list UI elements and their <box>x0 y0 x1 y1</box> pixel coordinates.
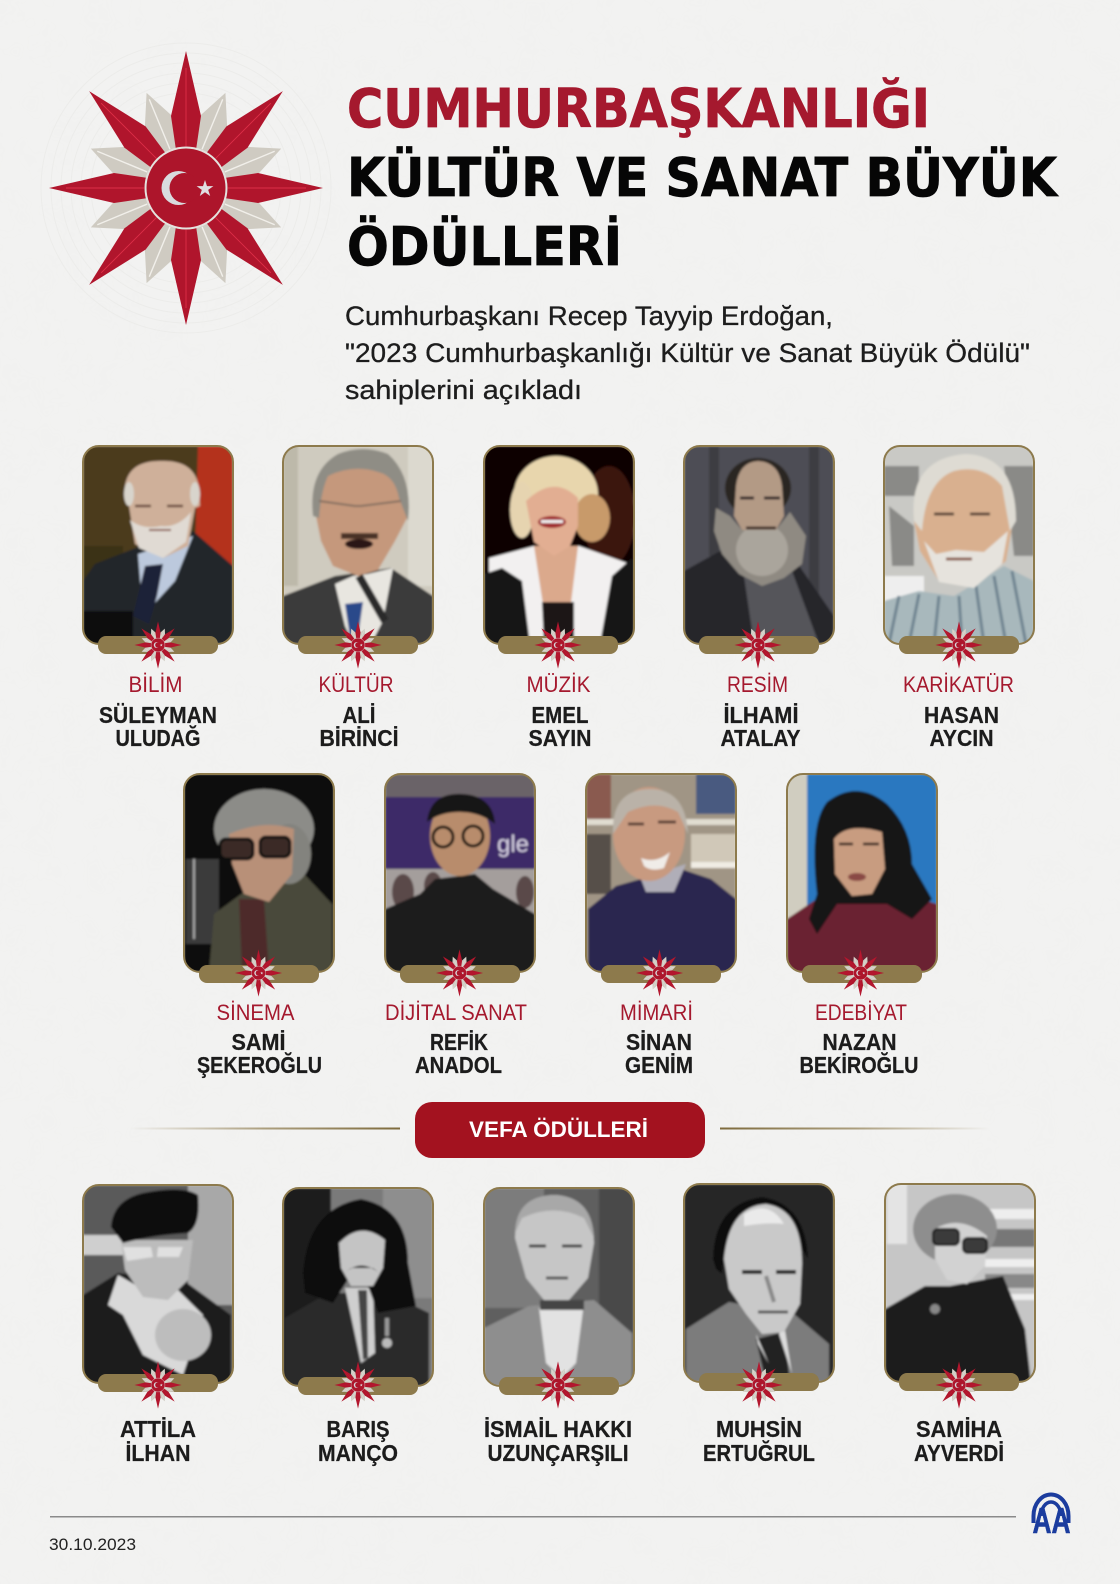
emblem <box>334 1361 382 1409</box>
emblem <box>935 621 983 669</box>
plaque <box>400 965 520 983</box>
card: Süleyman Uludağ <box>83 446 233 751</box>
date: 30.10.2023 <box>49 1535 136 1554</box>
card: Sami Şekeroğlu <box>184 774 334 1078</box>
card: İsmail Hakkı Uzunçarşılı <box>484 1188 634 1466</box>
plaque <box>499 1377 619 1395</box>
name: ULUDAĞ <box>116 724 200 751</box>
emblem <box>334 621 382 669</box>
name: UZUNÇARŞILI <box>488 1440 628 1466</box>
category: RESİM <box>727 672 788 697</box>
name <box>120 1416 196 1466</box>
category: SİNEMA <box>216 1000 295 1025</box>
name <box>720 702 800 751</box>
emblem <box>734 621 782 669</box>
name <box>703 1416 815 1466</box>
name <box>318 1416 398 1466</box>
category: EDEBİYAT <box>815 1000 907 1025</box>
name: ERTUĞRUL <box>703 1439 815 1466</box>
subtitle text <box>345 301 1030 405</box>
title line: black 1: KÜLTÜR VE SANAT BÜYÜK <box>347 146 1059 209</box>
name: SÜLEYMAN <box>99 702 217 728</box>
portrait <box>885 1184 1035 1382</box>
portrait <box>484 446 635 644</box>
portrait: gle <box>497 831 529 858</box>
portrait <box>586 774 736 972</box>
portrait <box>83 446 233 644</box>
name: MANÇO <box>318 1440 398 1466</box>
name <box>528 702 592 751</box>
name: GENİM <box>625 1052 693 1078</box>
name: ATALAY <box>720 725 800 751</box>
category: BİLİM <box>128 672 182 697</box>
emblem <box>534 1361 582 1409</box>
portrait <box>684 446 834 644</box>
card: Attila İlhan <box>83 1185 233 1466</box>
name: EMEL <box>532 702 588 728</box>
portrait <box>184 774 334 972</box>
logo: Anadolu Agency <box>1032 1494 1070 1541</box>
name: SİNAN <box>626 1029 692 1055</box>
emblem <box>134 1361 182 1409</box>
card: Nazan Bekiroğlu <box>787 774 937 1078</box>
card: Emel Sayın <box>484 446 635 751</box>
plaque <box>98 1374 218 1392</box>
plaque <box>699 1373 819 1391</box>
portrait <box>484 1188 634 1386</box>
name <box>197 1029 322 1078</box>
name: SAMİ <box>232 1029 286 1055</box>
card: İlhami Atalay <box>684 446 834 751</box>
name: İLHAN <box>126 1440 190 1466</box>
emblem <box>534 621 582 669</box>
section header: Vefa Ödülleri: VEFA ÖDÜLLERİ <box>469 1117 648 1142</box>
name: İSMAİL HAKKI <box>484 1416 632 1442</box>
name: ŞEKEROĞLU <box>197 1051 322 1078</box>
emblem <box>735 1361 783 1409</box>
portrait <box>283 1188 433 1386</box>
name: AYVERDİ <box>914 1440 1004 1466</box>
emblem <box>935 1361 983 1409</box>
card: Barış Manço <box>283 1188 433 1466</box>
plaque <box>298 1377 418 1395</box>
name <box>800 1029 918 1078</box>
portrait <box>83 1185 233 1383</box>
emblem <box>134 621 182 669</box>
subtitle text: "2023 Cumhurbaşkanlığı Kültür ve Sanat Büyük Ödülü" <box>345 338 1030 368</box>
name: ALİ <box>342 702 376 728</box>
category: MİMARİ <box>620 1000 693 1025</box>
name: ANADOL <box>415 1052 502 1078</box>
plaque <box>601 965 721 983</box>
category: KARİKATÜR <box>903 672 1014 697</box>
card: Ali Birinci <box>283 446 433 751</box>
card: Samiha Ayverdi <box>885 1184 1035 1466</box>
name: HASAN <box>924 702 999 728</box>
title <box>347 77 1059 278</box>
name: REFİK <box>430 1029 488 1055</box>
plaque <box>498 636 618 654</box>
plaque <box>98 636 218 654</box>
category: KÜLTÜR <box>318 672 394 697</box>
name: MUHSİN <box>716 1416 802 1442</box>
name: AYCIN <box>930 725 994 751</box>
emblem <box>837 949 884 997</box>
subtitle text: Cumhurbaşkanı Recep Tayyip Erdoğan, <box>345 301 833 331</box>
plaque <box>899 1373 1019 1391</box>
card: Hasan Aycın <box>884 446 1034 751</box>
name: ATTİLA <box>120 1416 196 1442</box>
name <box>625 1029 693 1078</box>
plaque <box>699 636 819 654</box>
name: SAYIN <box>528 725 592 751</box>
portrait <box>385 774 535 972</box>
name: BARIŞ <box>326 1416 390 1442</box>
category: DİJİTAL SANAT <box>385 1000 527 1025</box>
portrait <box>684 1184 834 1382</box>
card: Muhsin Ertuğrul <box>684 1184 834 1466</box>
emblem <box>235 949 282 997</box>
name <box>320 702 398 751</box>
plaque <box>298 636 418 654</box>
plaque <box>899 636 1019 654</box>
name <box>415 1029 502 1078</box>
category: MÜZİK <box>526 672 591 697</box>
name <box>484 1416 632 1466</box>
name: BEKİROĞLU <box>800 1051 918 1078</box>
logo: Anadolu Agency: AA <box>1032 1500 1070 1541</box>
emblem: large Turkish state star <box>41 43 331 333</box>
name: SAMİHA <box>916 1416 1002 1442</box>
name: İLHAMİ <box>724 702 798 728</box>
portrait <box>884 446 1034 644</box>
portrait <box>283 446 433 644</box>
emblem <box>436 949 483 997</box>
card: Sinan Genim <box>586 774 736 1078</box>
name <box>914 1416 1004 1466</box>
subtitle text: sahiplerini açıkladı <box>345 375 582 405</box>
section header: Vefa Ödülleri <box>130 1102 990 1158</box>
emblem <box>636 949 683 997</box>
title line: black 2: ÖDÜLLERİ <box>347 215 622 278</box>
title line: red: CUMHURBAŞKANLIĞI <box>347 77 930 140</box>
plaque <box>199 965 319 983</box>
footer line <box>50 1516 1016 1518</box>
card: Refik Anadol <box>385 774 535 1078</box>
portrait <box>787 774 937 972</box>
name: BİRİNCİ <box>320 725 398 751</box>
name <box>99 702 217 751</box>
plaque <box>802 965 922 983</box>
name: NAZAN <box>822 1029 896 1055</box>
name <box>924 702 999 751</box>
